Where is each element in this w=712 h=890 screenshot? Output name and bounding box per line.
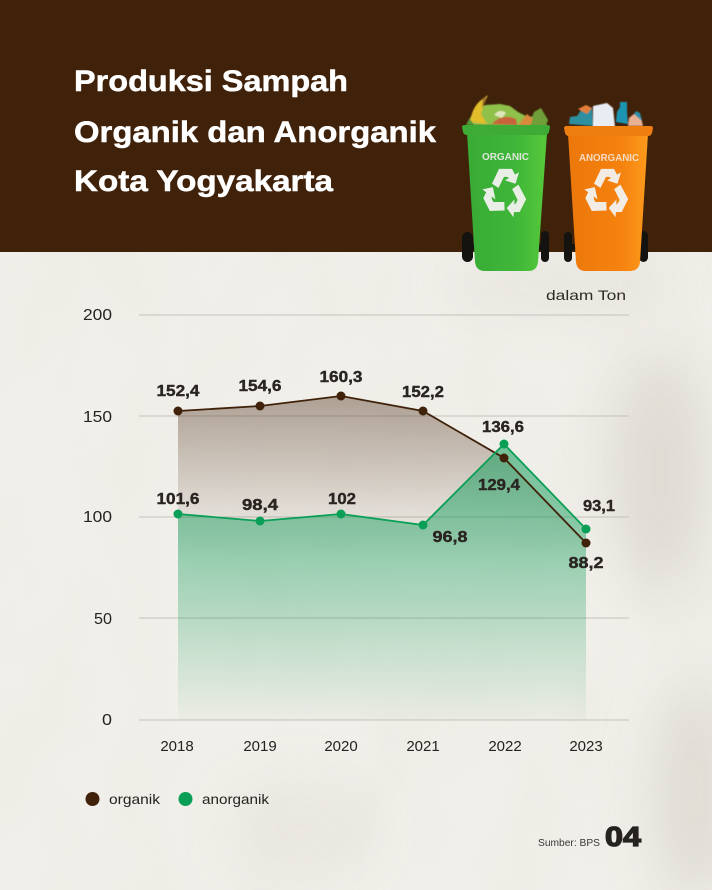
unit label: dalam Ton	[546, 287, 626, 303]
title: Organik dan Anorganik	[74, 116, 436, 149]
x axis labels: 2021	[406, 738, 440, 755]
anorganik values: 102	[328, 491, 356, 508]
icon: anorganic bin	[564, 102, 653, 271]
anorganik values: 93,1	[583, 498, 615, 515]
lid	[564, 126, 653, 136]
header band	[0, 0, 712, 252]
page number: 04	[605, 821, 641, 852]
title: Kota Yogyakarta	[74, 165, 333, 198]
anorganik values: 136,6	[482, 419, 524, 436]
wheels	[564, 231, 648, 262]
organik values: 129,4	[478, 477, 520, 494]
title	[74, 65, 436, 198]
organik values: 152,2	[402, 384, 444, 401]
source note: Sumber: BPS	[538, 838, 600, 849]
label: ANORGANIC	[579, 152, 639, 164]
wheels	[462, 231, 549, 262]
anorganik values: 96,8	[432, 529, 468, 546]
anorganik line	[174, 440, 590, 534]
y axis labels: 200	[83, 307, 112, 324]
organik values: 152,4	[156, 383, 200, 400]
lid	[462, 125, 550, 135]
textured paper background	[0, 252, 712, 890]
y axis labels: 50	[94, 611, 112, 628]
x axis labels	[160, 738, 603, 755]
x axis labels: 2022	[488, 738, 522, 755]
anorganik values: 98,4	[242, 497, 278, 514]
organik values: 88,2	[568, 555, 604, 572]
x axis labels: 2023	[569, 738, 603, 755]
y axis labels: 150	[83, 409, 112, 426]
label: ORGANIC	[482, 151, 529, 163]
title: Produksi Sampah	[74, 65, 348, 98]
x axis labels: 2020	[324, 738, 358, 755]
legend: anorganik	[178, 791, 270, 807]
line chart	[83, 307, 629, 755]
anorganik area	[178, 444, 586, 720]
body	[568, 134, 648, 271]
food waste	[466, 95, 548, 126]
y axis labels	[83, 307, 112, 729]
organik values: 160,3	[320, 369, 363, 386]
organik line	[174, 392, 590, 548]
legend	[86, 791, 270, 807]
legend: organik: organik	[109, 791, 161, 807]
organik area	[178, 396, 586, 720]
x axis labels: 2019	[243, 738, 277, 755]
body	[467, 133, 547, 271]
plastic waste	[569, 102, 643, 127]
legend: organik	[86, 791, 161, 807]
organik values	[156, 369, 604, 572]
icon: recycle symbol	[582, 169, 632, 219]
icon: organic bin	[462, 95, 550, 271]
y axis labels: 0	[102, 712, 112, 729]
organik values: 154,6	[238, 378, 282, 395]
anorganik values	[156, 419, 615, 546]
y axis labels: 100	[83, 509, 112, 526]
grid lines	[139, 315, 629, 720]
x axis labels: 2018	[160, 738, 194, 755]
anorganik values: 101,6	[156, 491, 200, 508]
legend: anorganik: anorganik	[202, 791, 270, 807]
icon: recycle symbol	[480, 169, 530, 219]
